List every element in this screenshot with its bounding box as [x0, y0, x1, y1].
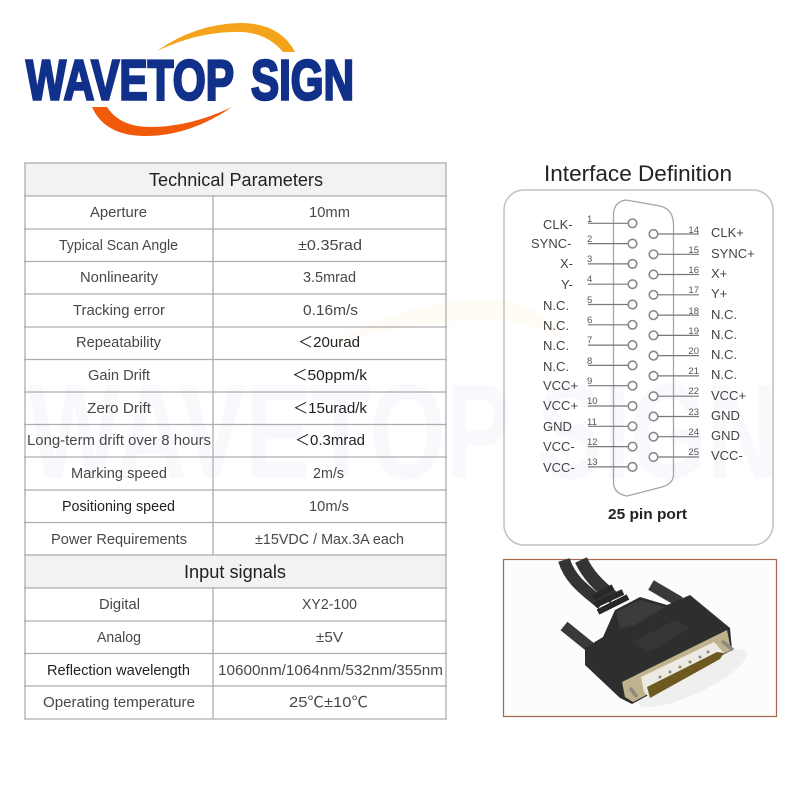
left pin labels: VCC+ [543, 398, 578, 413]
row: reflection wavelength: Reflection wavelength [47, 662, 190, 679]
left pins 1-13: 10 [587, 396, 598, 407]
cables [564, 560, 614, 604]
right pin labels: N.C. [711, 367, 737, 382]
row: digital: XY2-100 [302, 596, 357, 613]
body facet [632, 620, 690, 652]
row: marking speed [71, 465, 344, 482]
row: gain drift [88, 367, 368, 384]
left pin labels: N.C. [543, 318, 569, 333]
row: nonlinearity: Nonlinearity [80, 269, 158, 286]
row: positioning speed [62, 498, 349, 515]
front screws [630, 641, 733, 697]
right pins 14-25: 16 [688, 265, 699, 276]
row: positioning speed: Positioning speed [62, 498, 175, 515]
row: gain drift: Gain Drift [88, 367, 151, 384]
strain relief ribs [593, 587, 628, 612]
heading: interface definition: Interface Definition [544, 161, 732, 186]
parameters table [24, 163, 447, 719]
left pins 1-13: 13 [587, 457, 598, 468]
right pins 14-25: 24 [688, 427, 699, 438]
right pins 14-25: 14 [688, 225, 699, 236]
left pins 1-13: 5 [587, 295, 592, 306]
row: repeatability [76, 334, 360, 351]
row: analog [97, 629, 343, 646]
table grid lines [24, 163, 447, 719]
right pin labels: Y+ [711, 286, 727, 301]
soft shadow [631, 638, 753, 718]
gold contacts [647, 652, 724, 698]
row: tracking error [73, 302, 358, 319]
right pins 14-25: 20 [688, 346, 699, 357]
right pin labels: N.C. [711, 347, 737, 362]
row: marking speed: 2m/s [313, 465, 344, 482]
photo: connector cable [504, 560, 776, 718]
row: power requirements: ±15VDC / Max.3A each [255, 531, 404, 548]
row: aperture: Aperture [90, 204, 147, 221]
row: aperture [90, 204, 350, 221]
row: marking speed: Marking speed [71, 465, 167, 482]
row: gain drift: ＜50ppm/k [292, 367, 368, 384]
connector outline [614, 200, 674, 496]
row: operating temperature: 25℃±10℃ [289, 694, 368, 711]
logo wordmark: WAVETOP [26, 48, 234, 112]
logo wordmark: SIGN [251, 48, 354, 112]
right pins 14-25: 21 [688, 366, 699, 377]
row: digital [99, 596, 357, 613]
right pins 14-25: 19 [688, 326, 699, 337]
metal plate [622, 630, 731, 702]
row: analog: ±5V [316, 629, 343, 646]
right pins 14-25: 15 [688, 245, 699, 256]
left pins 1-13: 2 [587, 234, 592, 245]
left pins 1-13: 11 [587, 417, 597, 428]
right pin labels: X+ [711, 266, 727, 281]
right pin labels: VCC- [711, 448, 743, 463]
right pin labels: GND [711, 408, 740, 423]
row: digital: Digital [99, 596, 140, 613]
contact dots [658, 650, 710, 678]
row: long-term drift: ＜0.3mrad [295, 432, 365, 449]
right pin labels: CLK+ [711, 225, 744, 240]
row: tracking error: Tracking error [73, 302, 165, 319]
metal shell [641, 642, 724, 698]
left pins 1-13: 4 [587, 274, 592, 285]
right pin labels: VCC+ [711, 388, 746, 403]
right pins 14-25: 18 [688, 306, 699, 317]
photo background [504, 560, 776, 716]
left pins 1-13: 12 [587, 437, 598, 448]
rear thumbscrews [564, 585, 680, 647]
left pin labels: N.C. [543, 298, 569, 313]
row: long-term drift: Long-term drift over 8 hours [27, 432, 211, 449]
right pins 14-25: 17 [688, 285, 699, 296]
row: zero drift [87, 400, 368, 417]
right pin labels: SYNC+ [711, 246, 755, 261]
left pins 1-13 [587, 214, 637, 471]
logo [26, 23, 354, 136]
left pins 1-13: 3 [587, 254, 592, 265]
left pin labels: VCC+ [543, 378, 578, 393]
heading: input signals: Input signals [184, 562, 286, 582]
row: zero drift: Zero Drift [87, 400, 152, 417]
left pin labels: SYNC- [531, 236, 571, 251]
row: reflection wavelength: 10600nm/1064nm/532nm/355nm [218, 662, 443, 679]
left pin labels: CLK- [543, 217, 573, 232]
row: repeatability: ＜20urad [298, 334, 360, 351]
row: repeatability: Repeatability [76, 334, 161, 351]
row: typical scan angle: ±0.35rad [298, 237, 362, 254]
left pins 1-13: 9 [587, 376, 592, 387]
right pin labels: N.C. [711, 307, 737, 322]
right pins 14-25: 23 [688, 407, 699, 418]
row: zero drift: ＜15urad/k [293, 400, 368, 417]
row: typical scan angle: Typical Scan Angle [59, 237, 178, 254]
row: tracking error: 0.16m/s [303, 302, 358, 319]
grip texture [616, 600, 665, 628]
row: power requirements [51, 531, 404, 548]
heading: technical parameters: Technical Parameters [149, 170, 323, 190]
table section shading [25, 163, 446, 588]
panel: 25 pin diagram [504, 190, 773, 545]
row: analog: Analog [97, 629, 141, 646]
row: long-term drift [27, 432, 365, 449]
right pin labels: N.C. [711, 327, 737, 342]
right pins 14-25: 22 [688, 386, 699, 397]
panel border [504, 190, 773, 545]
left pins 1-13: 1 [587, 214, 592, 225]
row: power requirements: Power Requirements [51, 531, 187, 548]
left pin labels: VCC- [543, 439, 575, 454]
row: typical scan angle [59, 237, 362, 254]
row: nonlinearity: 3.5mrad [303, 269, 356, 286]
left pin labels: X- [560, 256, 573, 271]
logo bottom arc [92, 107, 232, 136]
row: reflection wavelength [47, 662, 443, 679]
left pin labels: N.C. [543, 338, 569, 353]
left pin labels [531, 217, 578, 475]
logo top arc [157, 23, 295, 52]
right pin labels: GND [711, 428, 740, 443]
left pins 1-13: 7 [587, 335, 592, 346]
right pins 14-25: 25 [688, 447, 699, 458]
left pins 1-13: 8 [587, 356, 592, 367]
left pin labels: Y- [561, 277, 573, 292]
connector body [585, 595, 732, 704]
left pin labels: N.C. [543, 359, 569, 374]
right pins 14-25 [649, 225, 699, 461]
row: nonlinearity [80, 269, 356, 286]
row: positioning speed: 10m/s [309, 498, 349, 515]
row: operating temperature [43, 694, 368, 711]
right pin labels [711, 225, 755, 463]
left pin labels: VCC- [543, 460, 575, 475]
left pins 1-13: 6 [587, 315, 592, 326]
row: operating temperature: Operating temperature [43, 694, 195, 711]
left pin labels: GND [543, 419, 572, 434]
row: aperture: 10mm [309, 204, 350, 221]
caption: 25 pin port: 25 pin port [608, 506, 687, 523]
